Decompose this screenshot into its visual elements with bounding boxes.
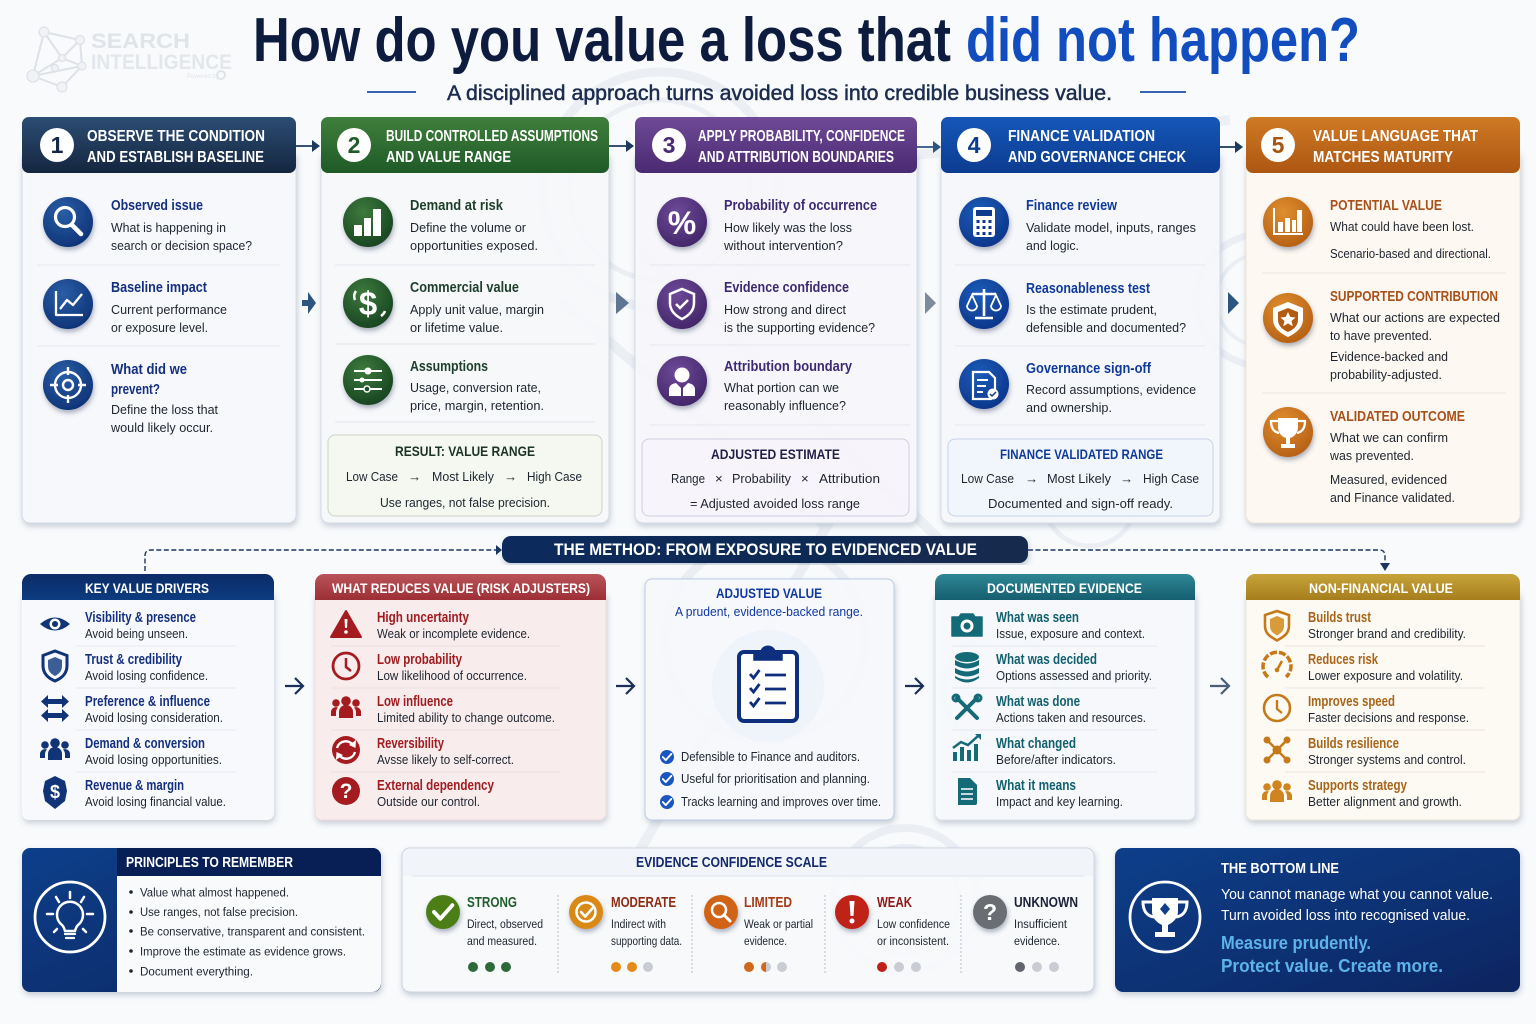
item: assumptions xyxy=(343,355,544,413)
item: probability of occurrence: % xyxy=(668,205,696,241)
evidence list xyxy=(952,610,1152,809)
drivers header: KEY VALUE DRIVERS xyxy=(85,581,209,596)
result: value range: High Case xyxy=(527,469,582,484)
result: value range: Low Case xyxy=(346,469,398,484)
item: baseline impact: Baseline impact xyxy=(111,280,207,296)
item: potential value: POTENTIAL VALUE xyxy=(1330,198,1442,214)
panel: principles to remember xyxy=(22,848,381,992)
bottom line text: Measure prudently. xyxy=(1221,932,1371,953)
item: attribution boundary: Attribution boundary xyxy=(724,359,852,375)
title: How do you value a loss that xyxy=(253,6,951,75)
result: adjusted estimate: = Adjusted avoided loss range xyxy=(690,496,860,511)
step 2 header: AND VALUE RANGE xyxy=(386,149,511,166)
result: finance validated range: Low Case xyxy=(961,471,1014,486)
item: governance sign-off xyxy=(959,359,1196,415)
arrow: step 1 to 2 xyxy=(296,140,320,152)
icon: people xyxy=(331,696,361,718)
evidence list: What was seen xyxy=(996,610,1079,626)
scale: weak: or inconsistent. xyxy=(877,934,949,948)
icon: dollar badge xyxy=(43,776,67,809)
item: attribution boundary: What portion can we xyxy=(724,380,839,395)
item: reasonableness test: Is the estimate prudent, xyxy=(1026,302,1157,317)
item: validated outcome: What we can confirm xyxy=(1330,430,1448,445)
arrow: step 3 to 4 xyxy=(917,141,941,153)
non-financial list: Stronger brand and credibility. xyxy=(1308,627,1466,641)
item: evidence confidence: How strong and direct xyxy=(724,302,846,317)
item: what did we prevent: What did we xyxy=(111,362,187,378)
result: adjusted estimate: × xyxy=(715,471,723,486)
icon: swap arrows xyxy=(41,695,69,722)
bottom line text: Protect value. Create more. xyxy=(1221,955,1443,976)
step 5 header: VALUE LANGUAGE THAT xyxy=(1313,128,1478,145)
panel: documented evidence xyxy=(935,574,1195,820)
risk list: Low influence xyxy=(377,694,453,710)
item: evidence confidence: is the supporting evidence? xyxy=(724,320,875,335)
item: baseline impact: Current performance xyxy=(111,302,227,317)
icon: people xyxy=(40,738,70,760)
step 1 header: AND ESTABLISH BASELINE xyxy=(87,149,264,166)
subtitle: A disciplined approach turns avoided loss into credible business value. xyxy=(447,81,1112,105)
evidence list: Options assessed and priority. xyxy=(996,669,1152,683)
arrow: mid 1 to 2 xyxy=(302,292,316,314)
arrow: mid 3 to 4 xyxy=(925,292,936,314)
scale: weak: Low confidence xyxy=(877,917,950,931)
risk list: High uncertainty xyxy=(377,610,469,626)
item: attribution boundary: reasonably influence? xyxy=(724,398,846,413)
arrow: step 4 to 5 xyxy=(1220,141,1243,153)
result: value range xyxy=(328,435,602,516)
evidence header xyxy=(935,574,1195,600)
checklist xyxy=(660,750,881,809)
arrow: mid 2 to 3 xyxy=(616,292,629,314)
item: evidence confidence: Evidence confidence xyxy=(724,280,849,296)
step 4 header: FINANCE VALIDATION xyxy=(1008,128,1155,145)
step 1 header: OBSERVE THE CONDITION xyxy=(87,128,265,145)
icon: question xyxy=(332,777,360,805)
driver list: Avoid losing consideration. xyxy=(85,711,223,725)
bottom line text: You cannot manage what you cannot value. xyxy=(1221,887,1493,903)
result: adjusted estimate: Attribution xyxy=(819,471,880,486)
evidence list: What changed xyxy=(996,736,1076,752)
item: finance review: and logic. xyxy=(1026,238,1079,253)
scale: strong: Direct, observed xyxy=(467,917,543,931)
result: value range: Use ranges, not false precision. xyxy=(380,495,550,510)
result: adjusted estimate: Probability xyxy=(732,471,791,486)
item: evidence confidence xyxy=(657,279,875,335)
driver list: Avoid losing opportunities. xyxy=(85,753,222,767)
item: assumptions: Assumptions xyxy=(410,359,488,375)
item: finance review xyxy=(959,197,1196,253)
logo watermark: Powered by xyxy=(187,74,219,80)
icon: shield xyxy=(43,651,67,681)
arrow: risk to adjusted xyxy=(616,678,634,694)
drivers header xyxy=(22,574,274,600)
item: what did we prevent: Define the loss that xyxy=(111,402,218,417)
arrow: drivers to risk xyxy=(285,678,303,694)
scale: weak: WEAK xyxy=(877,895,912,911)
icon: reverse arrows xyxy=(332,736,360,764)
non-financial list: Improves speed xyxy=(1308,694,1395,710)
item: potential value: What could have been lost. xyxy=(1330,219,1474,234)
non-financial list: Reduces risk xyxy=(1308,652,1379,668)
method banner: THE METHOD: FROM EXPOSURE TO EVIDENCED VALUE xyxy=(554,540,977,559)
driver list: Visibility & presence xyxy=(85,610,196,626)
principles list: Document everything. xyxy=(140,964,253,978)
panel: adjusted value: A prudent, evidence-backed range. xyxy=(675,604,863,619)
item: assumptions: Usage, conversion rate, xyxy=(410,380,541,395)
item: commercial value: or lifetime value. xyxy=(410,320,503,335)
non-financial list: Supports strategy xyxy=(1308,778,1407,794)
driver list: Demand & conversion xyxy=(85,736,205,752)
non-financial list xyxy=(1262,610,1469,809)
panel: evidence confidence scale xyxy=(402,848,1094,992)
result: finance validated range: → xyxy=(1120,471,1133,486)
icon: trophy xyxy=(1130,882,1200,952)
evidence list: What was decided xyxy=(996,652,1097,668)
panel: step 4 finance xyxy=(941,117,1220,523)
item: what did we prevent: would likely occur. xyxy=(110,420,213,435)
result: adjusted estimate: ADJUSTED ESTIMATE xyxy=(711,446,840,462)
icon: eye xyxy=(40,618,70,630)
item: supported contribution: to have prevented. xyxy=(1330,328,1432,343)
step 4 header: AND GOVERNANCE CHECK xyxy=(1008,149,1186,166)
item: probability of occurrence: Probability of occurrence xyxy=(724,198,877,214)
driver list: Avoid being unseen. xyxy=(85,627,188,641)
checklist: Defensible to Finance and auditors. xyxy=(681,750,860,764)
icon: rising chart xyxy=(953,734,981,761)
connector: dashed left xyxy=(145,545,502,571)
icon: network xyxy=(1264,737,1290,763)
logo watermark: INTELLIGENCE xyxy=(91,51,232,74)
bottom line text xyxy=(1221,861,1493,976)
non-financial list: Faster decisions and response. xyxy=(1308,711,1469,725)
result: finance validated range: High Case xyxy=(1143,471,1199,486)
arrow: mid 4 to 5 xyxy=(1228,292,1239,314)
item: validated outcome: and Finance validated. xyxy=(1330,490,1455,505)
evidence list: What it means xyxy=(996,778,1076,794)
principles list: Value what almost happened. xyxy=(140,886,289,900)
non-financial header xyxy=(1246,574,1520,600)
step 2 header xyxy=(321,117,609,173)
item: demand at risk: Define the volume or xyxy=(410,220,527,235)
item: demand at risk: Demand at risk xyxy=(410,198,504,214)
item: reasonableness test: defensible and documented? xyxy=(1026,320,1186,335)
evidence list: What was done xyxy=(996,694,1080,710)
evidence list: Actions taken and resources. xyxy=(996,711,1146,725)
item: observed issue xyxy=(43,197,252,253)
item: supported contribution xyxy=(1263,289,1500,382)
scale: moderate xyxy=(569,895,682,972)
risk header xyxy=(315,574,606,600)
scale: limited: Weak or partial xyxy=(744,917,813,931)
non-financial list: Builds resilience xyxy=(1308,736,1399,752)
result: value range: RESULT: VALUE RANGE xyxy=(395,443,535,459)
risk list xyxy=(331,610,555,809)
evidence list: Impact and key learning. xyxy=(996,795,1123,809)
risk list: Limited ability to change outcome. xyxy=(377,711,555,725)
icon: gauge xyxy=(1263,652,1291,677)
scale: strong xyxy=(426,895,543,972)
driver list: Avoid losing financial value. xyxy=(85,795,226,809)
evidence list: Before/after indicators. xyxy=(996,753,1116,767)
item: probability of occurrence: without intervention? xyxy=(723,238,843,253)
icon: question: ? xyxy=(340,780,352,803)
scale: limited: LIMITED xyxy=(744,895,792,911)
connector: dashed right xyxy=(1028,550,1390,571)
risk list: Outside our control. xyxy=(377,795,480,809)
panel: adjusted value: ADJUSTED VALUE xyxy=(716,585,822,601)
panel: principles to remember: PRINCIPLES TO REMEMBER xyxy=(126,855,294,871)
non-financial header: NON-FINANCIAL VALUE xyxy=(1309,581,1453,596)
non-financial list: Lower exposure and volatility. xyxy=(1308,669,1463,683)
item: observed issue: Observed issue xyxy=(111,198,203,214)
item: what did we prevent xyxy=(43,360,218,435)
icon: warning xyxy=(331,611,361,637)
driver list xyxy=(40,610,226,809)
scale: limited xyxy=(704,895,813,972)
result: finance validated range xyxy=(948,439,1213,516)
item: what did we prevent: prevent? xyxy=(111,382,160,398)
item: governance sign-off: Record assumptions, evidence xyxy=(1026,382,1196,397)
arrow: step 2 to 3 xyxy=(609,140,634,152)
step 3 header xyxy=(635,117,917,173)
arrow: adjusted to evidence xyxy=(905,678,923,694)
panel: what reduces value xyxy=(315,574,606,820)
icon: shield xyxy=(1265,611,1289,640)
watermark network xyxy=(542,72,1328,972)
item: supported contribution: What our actions are expected xyxy=(1330,310,1500,325)
panel: non-financial value xyxy=(1246,574,1520,820)
scale: unknown: evidence. xyxy=(1014,934,1060,948)
non-financial list: Better alignment and growth. xyxy=(1308,795,1462,809)
panel: step 2 build xyxy=(321,117,609,523)
step 5 header xyxy=(1246,117,1520,173)
item: reasonableness test xyxy=(959,279,1186,335)
item: validated outcome: VALIDATED OUTCOME xyxy=(1330,409,1465,425)
evidence list: Issue, exposure and context. xyxy=(996,627,1145,641)
result: adjusted estimate: × xyxy=(801,471,809,486)
title: did not happen? xyxy=(966,6,1360,75)
item: finance review: Finance review xyxy=(1026,198,1118,214)
step 5 header: 5 xyxy=(1272,132,1285,158)
scale: weak xyxy=(835,895,950,972)
method banner xyxy=(502,536,1028,563)
item: probability of occurrence xyxy=(657,197,877,253)
panel: the bottom line xyxy=(1115,848,1520,992)
item: potential value: Scenario-based and directional. xyxy=(1330,247,1491,261)
scale: limited: evidence. xyxy=(744,934,787,948)
principles list: Be conservative, transparent and consistent. xyxy=(140,924,365,938)
item: demand at risk: opportunities exposed. xyxy=(410,238,538,253)
result: finance validated range: Documented and sign-off ready. xyxy=(988,496,1173,511)
non-financial list: Builds trust xyxy=(1308,610,1371,626)
icon: clock xyxy=(1264,695,1290,721)
icon: clipboard xyxy=(712,630,824,742)
scale: unknown xyxy=(973,895,1078,972)
risk list: Low likelihood of occurrence. xyxy=(377,669,527,683)
item: validated outcome: was prevented. xyxy=(1329,448,1414,463)
panel: step 3 probability xyxy=(635,117,917,523)
scale: moderate: Indirect with xyxy=(611,917,666,931)
panel: evidence confidence scale: EVIDENCE CONFIDENCE SCALE xyxy=(636,855,827,871)
item: finance review: Validate model, inputs, ranges xyxy=(1026,220,1196,235)
item: validated outcome: Measured, evidenced xyxy=(1330,472,1447,487)
step 1 header xyxy=(22,117,296,173)
result: adjusted estimate xyxy=(642,439,909,516)
logo watermark: SEARCH xyxy=(91,30,190,53)
risk list: External dependency xyxy=(377,778,494,794)
step 3 header: 3 xyxy=(663,132,675,158)
result: finance validated range: Most Likely xyxy=(1047,471,1111,486)
icon: document xyxy=(958,778,977,805)
principles list xyxy=(129,886,365,978)
icon: database xyxy=(955,652,979,682)
step 2 header: 2 xyxy=(348,132,360,158)
item: potential value xyxy=(1263,197,1491,261)
evidence header: DOCUMENTED EVIDENCE xyxy=(987,581,1142,596)
item: observed issue: search or decision space? xyxy=(111,238,252,253)
item: commercial value: $ xyxy=(359,285,377,322)
step 3 header: AND ATTRIBUTION BOUNDARIES xyxy=(698,149,894,166)
item: governance sign-off: Governance sign-off xyxy=(1026,361,1151,377)
panel: step 1 observe xyxy=(22,117,296,523)
item: commercial value: Apply unit value, margin xyxy=(410,302,544,317)
item: validated outcome xyxy=(1263,407,1465,505)
scale: strong: and measured. xyxy=(467,934,537,948)
item: attribution boundary xyxy=(657,356,852,413)
scale: unknown: UNKNOWN xyxy=(1014,895,1078,911)
step 3 header: APPLY PROBABILITY, CONFIDENCE xyxy=(698,128,905,145)
item: assumptions: price, margin, retention. xyxy=(410,398,544,413)
checklist: Useful for prioritisation and planning. xyxy=(681,772,870,786)
item: commercial value: Commercial value xyxy=(410,280,519,296)
item: supported contribution: SUPPORTED CONTRIBUTION xyxy=(1330,289,1498,305)
step 4 header xyxy=(941,117,1220,173)
item: observed issue: What is happening in xyxy=(111,220,226,235)
result: value range: Most Likely xyxy=(432,469,494,484)
item: probability of occurrence: How likely was the loss xyxy=(724,220,852,235)
risk list: Reversibility xyxy=(377,736,444,752)
bottom line text: THE BOTTOM LINE xyxy=(1221,861,1339,877)
result: finance validated range: → xyxy=(1025,471,1038,486)
item: commercial value xyxy=(343,278,544,335)
panel: adjusted value xyxy=(645,579,894,820)
icon: dollar badge: $ xyxy=(50,782,60,802)
item: baseline impact xyxy=(43,279,227,335)
risk list: Weak or incomplete evidence. xyxy=(377,627,530,641)
result: finance validated range: FINANCE VALIDATED RANGE xyxy=(1000,446,1163,462)
item: supported contribution: Evidence-backed and xyxy=(1330,349,1448,364)
icon: tools xyxy=(953,695,981,718)
risk header: WHAT REDUCES VALUE (RISK ADJUSTERS) xyxy=(332,581,590,596)
logo watermark xyxy=(27,27,232,92)
non-financial list: Stronger systems and control. xyxy=(1308,753,1466,767)
principles list: Use ranges, not false precision. xyxy=(140,905,298,919)
result: value range: → xyxy=(504,469,517,484)
step 4 header: 4 xyxy=(968,132,981,158)
risk list: Avsse likely to self-correct. xyxy=(377,753,514,767)
bottom line text: Turn avoided loss into recognised value. xyxy=(1221,908,1470,924)
panel: step 5 value language xyxy=(1246,117,1520,523)
icon: people xyxy=(1262,780,1292,802)
scale: strong: STRONG xyxy=(467,895,517,911)
item: supported contribution: probability-adjusted. xyxy=(1330,367,1442,382)
arrow: evidence to non-financial xyxy=(1210,678,1229,694)
step 5 header: MATCHES MATURITY xyxy=(1313,149,1453,166)
scale: moderate: MODERATE xyxy=(611,895,676,911)
scale: unknown: ? xyxy=(983,899,997,925)
panel: key value drivers xyxy=(22,574,274,820)
item: reasonableness test: Reasonableness test xyxy=(1026,281,1150,297)
icon: camera xyxy=(952,614,982,636)
item: baseline impact: or exposure level. xyxy=(111,320,208,335)
risk list: Low probability xyxy=(377,652,462,668)
item: governance sign-off: and ownership. xyxy=(1026,400,1112,415)
icon: clock xyxy=(333,653,359,679)
icon: light bulb xyxy=(35,882,105,952)
checklist: Tracks learning and improves over time. xyxy=(681,795,881,809)
driver list: Avoid losing confidence. xyxy=(85,669,208,683)
result: value range: → xyxy=(408,469,421,484)
result: adjusted estimate: Range xyxy=(671,471,705,486)
step 1 header: 1 xyxy=(51,132,64,158)
driver list: Revenue & margin xyxy=(85,778,184,794)
driver list: Preference & influence xyxy=(85,694,210,710)
driver list: Trust & credibility xyxy=(85,652,182,668)
item: demand at risk xyxy=(343,197,538,253)
scale: moderate: supporting data. xyxy=(611,934,682,948)
principles list: Improve the estimate as evidence grows. xyxy=(140,944,346,958)
scale: unknown: Insufficient xyxy=(1014,917,1067,931)
step 2 header: BUILD CONTROLLED ASSUMPTIONS xyxy=(386,128,598,145)
